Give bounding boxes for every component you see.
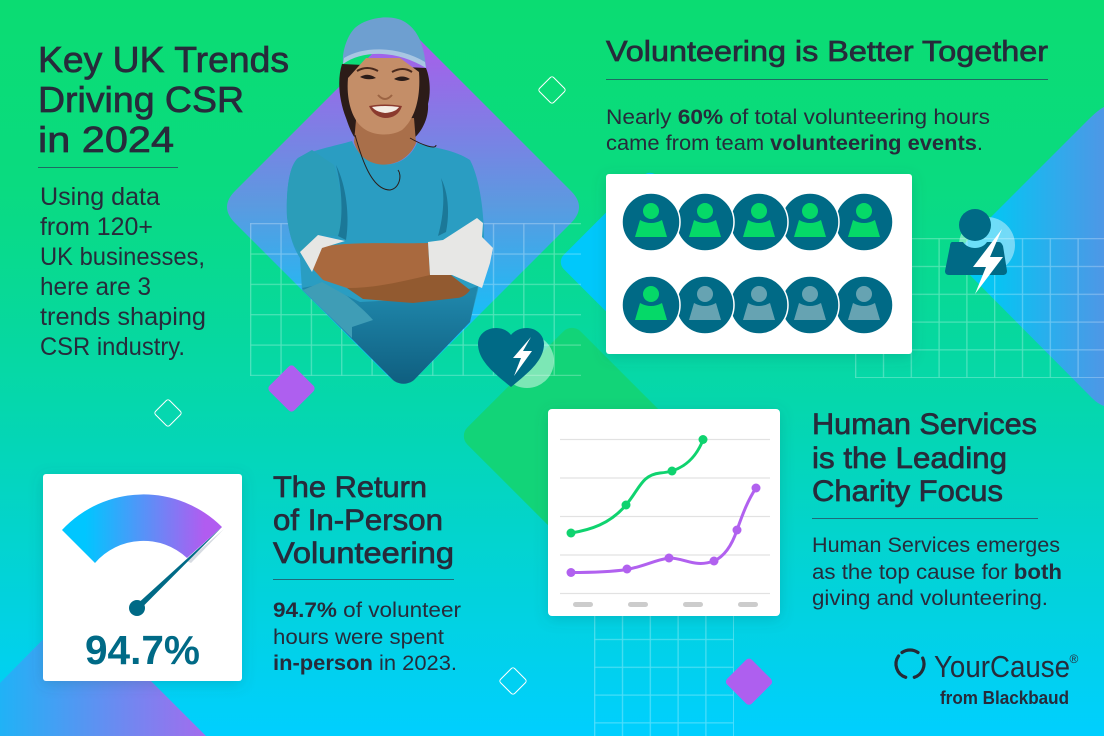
glove	[428, 218, 493, 288]
neck	[354, 118, 416, 165]
heading: human services: Human Services	[812, 408, 1037, 441]
decorative diamond: large blue on right edge	[952, 107, 1104, 406]
logo: YourCause from Blackbaud	[896, 649, 1078, 708]
intro text: UK businesses,	[40, 243, 205, 271]
logo: YourCause from Blackbaud: ®	[1070, 652, 1078, 666]
title: Driving CSR	[38, 79, 244, 120]
panel: line chart card	[548, 409, 780, 616]
heading: human services: Charity Focus	[812, 475, 1003, 508]
gauge value: 94.7%	[85, 627, 200, 673]
text: in-person stat	[273, 599, 461, 675]
smile	[369, 104, 402, 118]
nose	[378, 95, 392, 99]
text: human services detail: as the top cause for both	[812, 561, 1062, 584]
intro text: CSR industry.	[40, 333, 185, 361]
outline diamond bottom	[499, 667, 527, 695]
intro text: here are 3	[40, 273, 151, 301]
logo: YourCause from Blackbaud: from Blackbaud	[940, 688, 1069, 708]
purple series	[566, 484, 760, 577]
shirt sleeve seams	[336, 165, 448, 240]
people row 2	[622, 276, 893, 334]
background grid: right	[855, 238, 1104, 378]
gauge needle	[135, 527, 222, 610]
heading: human services: is the Leading	[812, 442, 1007, 475]
logo ring	[896, 650, 924, 677]
text: in-person stat: 94.7% of volunteer	[273, 599, 461, 622]
sleeve left	[287, 150, 342, 252]
brows	[357, 68, 412, 72]
lower shirt	[302, 284, 478, 384]
panel: people card	[606, 174, 912, 354]
green series	[566, 435, 708, 538]
lower arm	[347, 272, 470, 303]
shirt light folds	[303, 282, 373, 338]
text: in-person stat: hours were spent	[273, 626, 444, 649]
gauge arc	[62, 494, 222, 563]
outline diamond top	[538, 76, 566, 104]
decorative diamond: cyan behind people card	[557, 169, 743, 355]
decorative diamond: blue-purple bottom left	[0, 606, 206, 736]
elbow band	[300, 235, 345, 272]
heading: volunteering is better together: Volunteering is Better Together	[606, 36, 1048, 68]
icon: person with lightning	[945, 209, 1015, 294]
panel: gauge card	[43, 474, 242, 681]
hair wisps	[355, 135, 436, 190]
background grid: bottom	[594, 611, 734, 736]
photo: smiling volunteer with crossed arms	[287, 17, 493, 384]
text: team volunteering stat	[606, 106, 990, 155]
text: in-person stat: in-person in 2023.	[273, 652, 457, 675]
people row 1	[622, 193, 893, 251]
text: human services detail: Human Services emerges	[812, 534, 1060, 557]
logo: YourCause from Blackbaud: YourCause	[934, 649, 1070, 684]
intro text: trends shaping	[40, 303, 206, 331]
intro text: from 120+	[40, 213, 153, 241]
decorative diamond: green behind line chart	[459, 323, 685, 549]
eyes	[360, 75, 410, 81]
heading: return of in-person: Volunteering	[273, 537, 454, 570]
heading: return of in-person	[273, 471, 454, 570]
icon: heart with lightning	[478, 328, 554, 388]
intro text	[40, 183, 206, 361]
small purple diamond left	[267, 364, 316, 413]
text: human services detail: giving and volunteering.	[812, 587, 1048, 610]
text: team volunteering stat: came from team volunteering events .	[606, 132, 983, 155]
hair	[339, 64, 430, 142]
heading: human services	[812, 408, 1037, 508]
background grid: centre	[250, 223, 581, 376]
upper arm	[312, 243, 430, 288]
heading: return of in-person: The Return	[273, 471, 427, 504]
gauge needle shadow	[187, 529, 224, 563]
panel: photo diamond	[227, 31, 579, 383]
title	[38, 39, 289, 160]
shirt	[287, 141, 484, 384]
text: team volunteering stat: Nearly 60% of total volunteering hours	[606, 106, 990, 129]
outline diamond left	[154, 399, 182, 427]
text: human services detail	[812, 534, 1062, 610]
face	[348, 58, 419, 134]
axis labels	[573, 602, 758, 607]
heading: return of in-person: of In-Person	[273, 504, 443, 537]
small purple diamond bottom	[724, 657, 774, 706]
cap	[343, 17, 426, 67]
title: Key UK Trends	[38, 39, 289, 80]
intro text: Using data	[40, 183, 160, 211]
title: in 2024	[38, 119, 174, 160]
